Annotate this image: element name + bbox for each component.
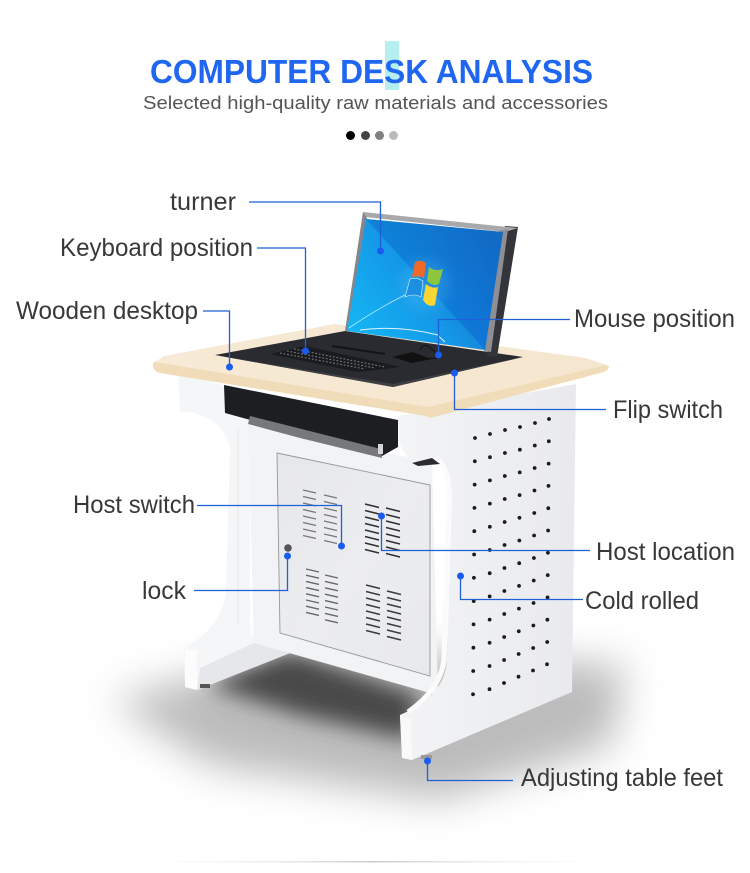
perforated holes: [473, 419, 549, 696]
callout: host switch: Host switch: [73, 491, 195, 519]
callout: turner: turner: [170, 188, 236, 216]
vent slots: [303, 490, 401, 640]
keyboard tray: [215, 331, 523, 387]
lift-up monitor: [345, 212, 518, 357]
door lock: [284, 544, 292, 552]
callout: adjusting table feet: Adjusting table feet: [521, 764, 723, 792]
wooden desktop: [153, 324, 609, 418]
callout: cold rolled: [457, 572, 699, 615]
callout: adjusting table feet: [424, 758, 723, 792]
cabinet door: [277, 453, 430, 676]
floor shadow: [112, 650, 625, 800]
callout: keyboard position: [60, 234, 309, 354]
title: COMPUTER DESK ANALYSIS: [150, 53, 593, 90]
back panel: [248, 425, 438, 695]
subtitle: Selected high-quality raw materials and accessories: [143, 92, 608, 113]
callout: wooden desktop: Wooden desktop: [16, 297, 198, 325]
callout: host location: Host location: [596, 538, 735, 566]
callout: lock: [142, 552, 291, 605]
callout: host location: [378, 512, 735, 566]
callout: cold rolled: Cold rolled: [585, 587, 699, 615]
pagination dots: [346, 131, 398, 140]
callout: flip switch: [451, 370, 723, 424]
black drawer: [224, 385, 398, 458]
callout: flip switch: Flip switch: [613, 396, 723, 424]
callout: mouse position: Mouse position: [574, 305, 735, 333]
left leg: [178, 372, 290, 690]
windows logo: [405, 261, 443, 306]
callout: host switch: [73, 491, 345, 550]
desk illustration: [153, 212, 609, 760]
callout: lock: lock: [142, 577, 186, 605]
callout: wooden desktop: [16, 297, 233, 370]
callout: turner: [170, 188, 384, 254]
base line under the desk: [110, 861, 640, 862]
screen: [347, 219, 503, 350]
callout: keyboard position: Keyboard position: [60, 234, 253, 262]
right side panel: [398, 384, 576, 760]
callout: mouse position: [435, 305, 735, 358]
